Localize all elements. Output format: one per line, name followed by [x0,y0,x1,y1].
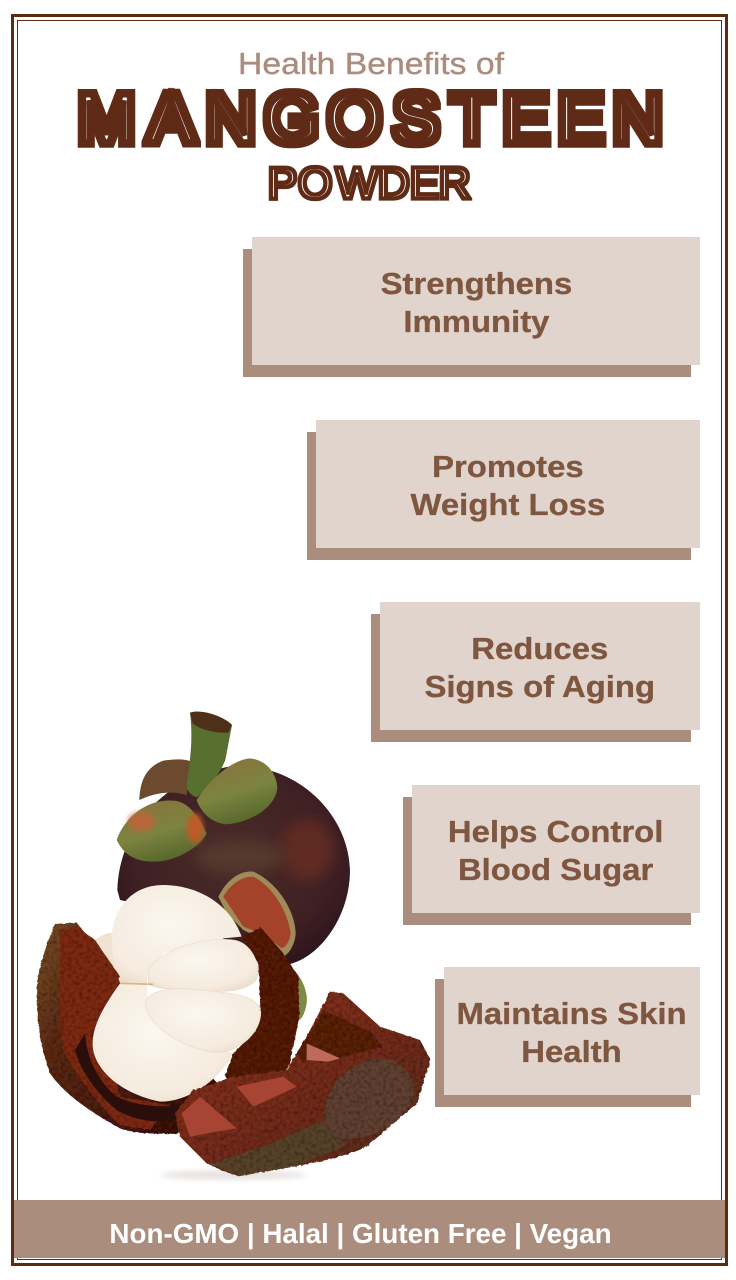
benefit card: Helps Control Blood Sugar: Blood Sugar [458,852,654,887]
back fruit sepal, upper left [139,759,192,800]
flesh: lower lobe [93,983,233,1102]
dark channel under flesh [75,1033,180,1121]
ground shadow [160,1170,307,1180]
subtitle: Health Benefits of: Health Benefits of [238,46,504,81]
back fruit sepal, right [197,758,277,824]
benefit card: Helps Control Blood Sugar: Helps Control [448,814,664,849]
left rind lip over flesh [67,927,120,993]
benefit card: Helps Control Blood Sugar [403,785,700,925]
front peel piece [175,992,431,1176]
title block [78,46,663,208]
benefit card: Maintains Skin Health: Maintains Skin [457,996,687,1031]
benefit card: Maintains Skin Health [435,967,700,1107]
flesh core seam [120,983,153,984]
flesh: lower right lobe [145,989,261,1053]
benefit card: Reduces Signs of Aging: Signs of Aging [425,669,655,704]
benefit card: Promotes Weight Loss [307,420,700,560]
benefit card: Strengthens Immunity [243,237,700,377]
stem cut top [190,712,232,733]
benefit card: Maintains Skin Health: Health [522,1034,622,1069]
rust inner rind [60,927,170,1130]
footer banner: Non-GMO | Halal | Gluten Free | Vegan [109,1218,612,1249]
benefit card: Promotes Weight Loss: Promotes [432,449,584,484]
opened red sepal [218,871,296,957]
benefit card: Strengthens Immunity: Strengthens [380,266,572,301]
inner rind, right side [225,927,299,1095]
back fruit body [117,766,350,964]
flesh: middle lobe [148,939,258,992]
benefit card: Promotes Weight Loss: Weight Loss [411,487,605,522]
benefit card: Reduces Signs of Aging: Reduces [471,631,608,666]
heading: POWDER: POWDER [268,159,470,208]
open fruit left rind [37,923,227,1134]
benefit card: Reduces Signs of Aging [371,602,700,742]
heading: MANGOSTEEN: MANGOSTEEN [78,80,663,157]
benefit card: Strengthens Immunity: Immunity [403,304,549,339]
green sliver behind rind [288,965,307,1022]
flesh: top lobe [112,885,242,985]
back fruit stem [187,712,232,797]
footer banner [14,1200,725,1258]
flesh: far left lobe [95,933,120,977]
back fruit sepal, lower left [117,801,207,862]
